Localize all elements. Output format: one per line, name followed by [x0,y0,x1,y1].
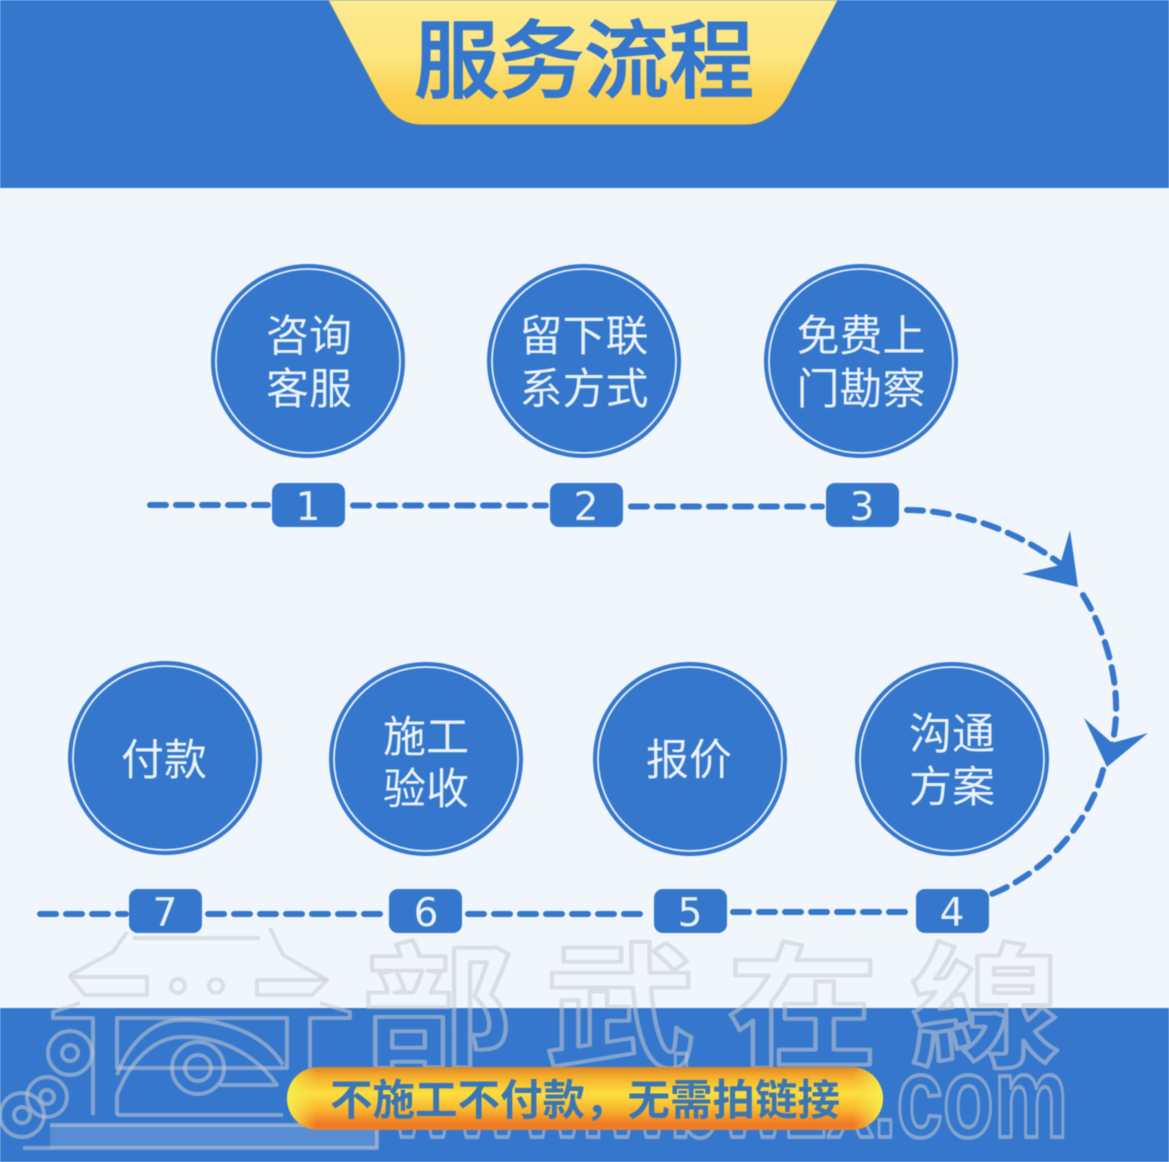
step 5: 5 [678,891,702,936]
header band [0,0,1169,188]
callout pill: 不施工不付款，无需拍链接 [330,1078,840,1125]
step 7: 7 [153,891,177,936]
step 4: 沟通 [909,711,995,759]
step 5: 报价 [646,737,732,785]
step 6: 验收 [383,766,469,814]
step 7: 付款 [121,737,207,785]
step 3 [764,264,958,530]
step 6 [329,662,523,936]
dashed path: right curve lower [992,595,1116,894]
step 1 [211,264,405,530]
dashed path: upper row [150,505,822,506]
watermark chinese text: 部武在線 [362,934,1092,1085]
step 1: 客服 [266,366,352,414]
step 2: 留下联 [520,313,648,361]
dashed path: lower row [40,912,912,914]
dashed path: right curve upper [907,510,1062,565]
step 2 [487,264,681,530]
callout pill [287,1067,883,1130]
title: 服务流程 [414,15,754,110]
title plate [328,0,838,125]
arrowhead lower [1084,718,1148,767]
step 6: 施工 [383,714,469,762]
step 2: 系方式 [520,366,648,414]
step 2: 2 [574,485,598,530]
step 4 [855,662,1049,936]
step 1: 咨询 [266,313,352,361]
footer band [0,1008,1169,1162]
step 6: 6 [414,891,438,936]
watermark logo: temple roof [0,928,377,1148]
step 1: 1 [296,485,320,530]
arrowhead upper [1022,530,1078,587]
step 5 [593,662,787,936]
step 4: 方案 [909,764,995,812]
step 7 [68,661,262,936]
watermark [0,928,1092,1162]
step 3: 3 [850,485,874,530]
step 3: 门勘察 [796,366,926,414]
step 4: 4 [940,891,964,936]
step 3: 免费上 [796,313,926,361]
